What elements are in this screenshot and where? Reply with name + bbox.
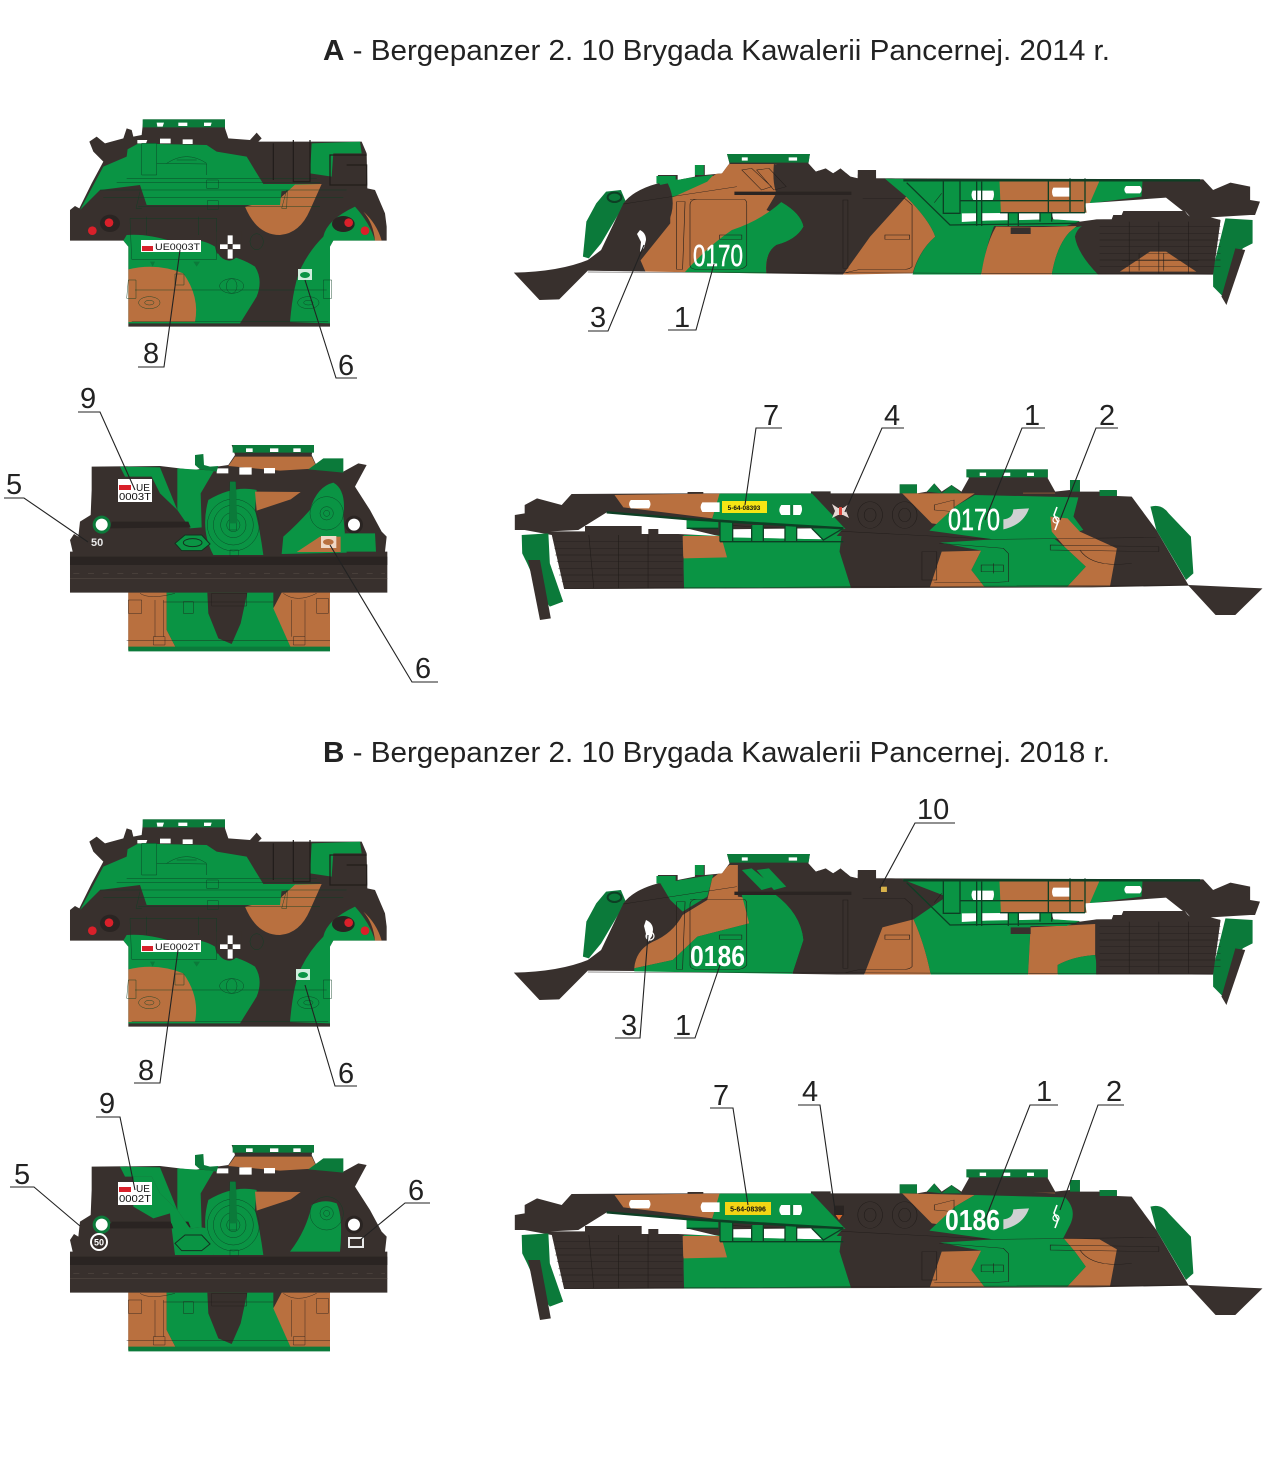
registration plate: front A: UE0003T	[155, 242, 200, 253]
callout 2: 2	[1099, 400, 1115, 432]
callout 4: 4	[884, 400, 900, 432]
tow bumps on upper deck	[742, 868, 786, 890]
callout 3: 3	[621, 1010, 637, 1042]
callout 6 rear	[330, 545, 438, 685]
callout 2: 2	[1106, 1076, 1122, 1108]
decal 2: emblem	[1053, 507, 1059, 530]
decal 2: emblem B	[1053, 1205, 1059, 1228]
callout 5	[4, 469, 88, 542]
front view: scheme A	[70, 119, 387, 327]
callout 6 front: 6	[338, 350, 354, 382]
callout 1 lower	[985, 400, 1045, 520]
callout 6 front	[305, 280, 357, 382]
callout 2	[1060, 400, 1118, 520]
callout 2	[1060, 1076, 1124, 1210]
green boxes on deck	[656, 165, 712, 183]
icon: decal 6 front B	[296, 969, 310, 980]
hull detail lines	[588, 887, 1221, 974]
registration plate: rear B: UE	[136, 1184, 150, 1195]
decal 1: number 0186 lower: 0186	[945, 1205, 1000, 1237]
callout 6 front: 6	[338, 1058, 354, 1090]
boom and struts: A upper	[903, 178, 1200, 234]
side view right: scheme A	[514, 154, 1260, 305]
callout 7: 7	[763, 400, 779, 432]
side view left: scheme A	[515, 469, 1262, 620]
callout 3	[615, 935, 648, 1042]
rear view: scheme B	[70, 1145, 387, 1351]
decal 1: number 0186: 0186	[690, 941, 745, 973]
registration number: yellow plate 7 B	[725, 1202, 771, 1215]
callout 9: 9	[99, 1088, 115, 1120]
callout 9: 9	[80, 383, 96, 415]
callout 8: 8	[143, 338, 159, 370]
callout 5: 5	[14, 1159, 30, 1191]
callout 7: 7	[713, 1080, 729, 1112]
callout 3: 3	[590, 302, 606, 334]
callout 7	[745, 400, 782, 505]
registration number: yellow plate 7 A	[722, 501, 767, 513]
callout 5: 5	[6, 469, 22, 501]
callout 8	[138, 250, 180, 370]
side view left: scheme B	[515, 1169, 1262, 1320]
decal 4: shield emblem	[834, 1206, 844, 1220]
callout 8: 8	[138, 1055, 154, 1087]
panel: grey exhaust shape	[1003, 1208, 1029, 1229]
registration number: yellow plate 7 B: 5-64-08396	[730, 1206, 766, 1214]
decal 3: knight emblem A	[637, 230, 646, 252]
registration plate: rear A	[118, 479, 152, 503]
callout 5	[10, 1159, 80, 1226]
callout 10	[880, 794, 955, 888]
wheels and cable	[858, 502, 917, 528]
boom and struts: A lower	[550, 512, 843, 542]
registration plate: front B	[141, 940, 201, 953]
speed marking 50 rear A: 50	[91, 537, 103, 549]
decal 4: cross emblem	[832, 504, 849, 518]
title: scheme B: B - Bergepanzer 2. 10 Brygada Kawalerii Pancernej. 2018 r.	[323, 737, 1110, 769]
decal 3: knight emblem B	[644, 920, 654, 942]
decal 1: number 0170: 0170	[693, 238, 743, 273]
hull detail lines	[554, 1200, 1188, 1288]
callout 4	[798, 1076, 835, 1210]
registration number: yellow plate 7 A: 5-64-08393	[728, 505, 761, 512]
callout 8	[134, 950, 178, 1087]
callout 1 lower: 1	[1024, 400, 1040, 432]
rear view: scheme A	[70, 445, 387, 651]
callout 1	[674, 965, 720, 1042]
callout 10: 10	[917, 794, 949, 826]
speed marking 50 circle rear B	[90, 1233, 108, 1251]
callout 6 rear	[360, 1175, 430, 1240]
boom and struts: B lower	[550, 1212, 843, 1242]
callout 1 lower	[985, 1076, 1058, 1220]
panel: grey exhaust shape	[1003, 508, 1029, 529]
callout 6 rear: 6	[415, 653, 431, 685]
callout 1: 1	[674, 302, 690, 334]
icon: boom openings	[629, 1200, 802, 1215]
callout 7	[710, 1080, 748, 1205]
green patch with wheel	[282, 458, 376, 554]
wheels and cable	[858, 1202, 917, 1228]
callout labels: scheme B	[10, 794, 1124, 1240]
decal 1: number 0170 lower: 0170	[948, 502, 1000, 537]
callout 6 front	[305, 985, 357, 1090]
green boxes on deck	[656, 865, 712, 883]
callout 4	[845, 400, 904, 512]
callout 9	[96, 1088, 135, 1190]
callout 1 lower: 1	[1036, 1076, 1052, 1108]
dark bar under deck	[734, 892, 851, 895]
icon: boom openings	[629, 500, 802, 515]
dark bar under deck	[734, 192, 851, 195]
hull detail lines	[588, 187, 1221, 274]
callout 3	[588, 245, 644, 334]
icon: decal 6 rear B	[348, 1237, 364, 1248]
registration plate: rear B	[118, 1182, 152, 1205]
tow bumps on upper deck	[742, 168, 786, 190]
icon: decal 6 rear A	[321, 536, 336, 548]
callout 1: 1	[675, 1010, 691, 1042]
title: scheme A: A - Bergepanzer 2. 10 Brygada Kawalerii Pancernej. 2014 r.	[323, 35, 1110, 67]
callout 1	[668, 264, 714, 334]
registration plate: front A	[141, 240, 201, 253]
registration plate: rear A: UE	[136, 483, 150, 494]
callout 4: 4	[802, 1076, 818, 1108]
decal 10: small marker	[881, 887, 887, 892]
registration plate: rear A: 0003T	[119, 492, 151, 503]
green side patch	[110, 1158, 343, 1255]
callout labels: scheme A	[4, 245, 1118, 685]
callout 9	[78, 383, 135, 490]
hull detail lines	[554, 500, 1188, 588]
icon: decal 6 front A	[298, 269, 312, 280]
registration plate: rear B: 0002T	[119, 1194, 151, 1205]
side view right: scheme B	[514, 854, 1260, 1005]
registration plate: front B: UE0002T	[155, 942, 200, 953]
front view: scheme B	[70, 819, 387, 1027]
boom and struts: B upper	[903, 878, 1200, 934]
callout 6 rear: 6	[408, 1175, 424, 1207]
speed marking 50 circle rear B: 50	[94, 1238, 104, 1248]
